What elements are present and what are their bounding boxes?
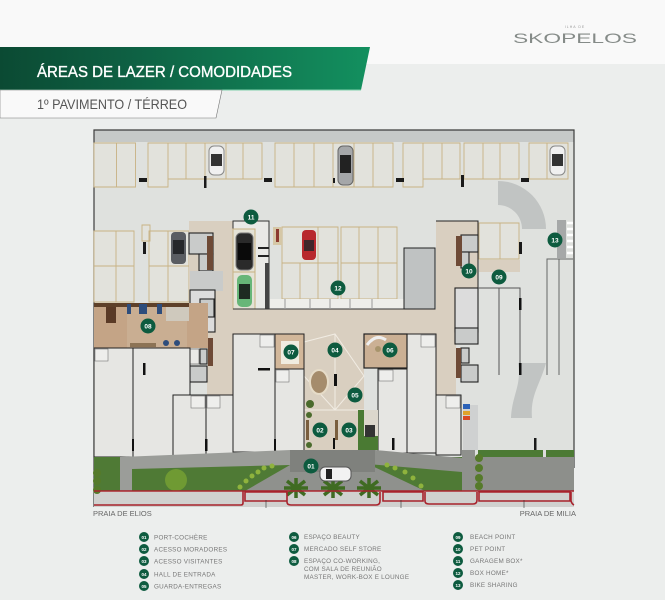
store markers: [132, 363, 394, 451]
sidewalk ticks: [266, 500, 524, 508]
map number markers: 03: [345, 428, 353, 434]
logo: Ilha de Skopelos: ILHA DE: [565, 25, 585, 29]
map number markers: 09: [495, 274, 503, 282]
map number markers: 12: [334, 286, 342, 292]
legend column 2: [289, 532, 409, 581]
car: gray top: [338, 146, 353, 185]
map number markers: [140, 210, 562, 474]
lot markers: [139, 175, 536, 450]
legend column 2: MASTER, WORK-BOX E LOUNGE: [304, 574, 409, 581]
legend column 1: GUARDA-ENTREGAS: [154, 584, 221, 590]
location labels: PRAIA DE ELIOS: [93, 509, 152, 518]
plaza: [304, 334, 364, 410]
legend column 3: [453, 532, 523, 590]
legend column 1: ACESSO VISITANTES: [154, 558, 223, 566]
legend column 3: PET POINT: [470, 546, 505, 553]
car: black: [236, 233, 253, 270]
legend column 3: 09: [455, 535, 461, 540]
map number markers: 06: [386, 348, 394, 354]
legend column 3: BOX HOME*: [470, 570, 509, 577]
subtitle banner: 1º PAVIMENTO / TÉRREO: [37, 96, 187, 112]
car: red: [302, 230, 316, 260]
store fixtures: [95, 335, 460, 408]
map number markers: 08: [144, 324, 152, 330]
bike sharing rack: [557, 220, 573, 258]
title banner: [0, 47, 370, 90]
bike colours: [463, 404, 478, 450]
map number markers: 07: [287, 350, 295, 356]
coworking room: [94, 303, 208, 348]
core left: [187, 233, 223, 382]
legend column 2: ESPAÇO CO-WORKING,: [304, 558, 380, 565]
car at port-cochère: [320, 467, 351, 481]
legend column 1: 04: [141, 572, 147, 577]
planters: [207, 236, 462, 378]
shrubs and palms: [93, 454, 483, 498]
beach point strip: [436, 221, 573, 375]
legend column 2: 08: [291, 559, 297, 564]
map number markers: 11: [248, 214, 255, 222]
legend column 3: BEACH POINT: [470, 534, 515, 541]
legend column 1: ACESSO MORADORES: [154, 546, 227, 554]
location labels: [93, 509, 576, 518]
legend column 1: HALL DE ENTRADA: [154, 572, 216, 578]
legend column 3: GARAGEM BOX*: [470, 558, 523, 565]
grounds and road: [94, 450, 574, 507]
stores: [94, 334, 461, 457]
parking: top row: [94, 143, 568, 187]
legend column 1: 03: [141, 559, 147, 564]
map number markers: 10: [465, 268, 473, 276]
legend column 1: 05: [141, 584, 147, 589]
legend column 3: 13: [455, 583, 461, 588]
car: white top left: [209, 146, 224, 175]
car: white top right: [550, 146, 565, 175]
logo: Ilha de Skopelos: SKOPELOS: [513, 30, 637, 46]
beige circulation: [189, 221, 478, 452]
car: dark gray: [171, 232, 186, 264]
legend column 2: COM SALA DE REUNIÃO: [304, 564, 382, 573]
parking: middle rows: [94, 223, 519, 302]
ramps: [498, 181, 546, 418]
location labels: PRAIA DE MILIA: [520, 509, 576, 518]
floor plan: [93, 130, 574, 508]
title banner: ÁREAS DE LAZER / COMODIDADES: [37, 64, 292, 81]
map number markers: 13: [551, 238, 559, 244]
legend column 1: [139, 532, 227, 591]
map number markers: 02: [316, 428, 324, 434]
legend column 3: 12: [455, 571, 461, 576]
legend column 2: 07: [291, 547, 297, 552]
subtitle banner: [0, 90, 222, 118]
core right: [455, 235, 478, 382]
map number markers: 05: [351, 392, 359, 400]
garage box area: [233, 221, 282, 309]
map number markers: 04: [331, 348, 339, 354]
legend column 2: 06: [291, 535, 297, 540]
legend column 3: BIKE SHARING: [470, 582, 518, 589]
car: green: [237, 275, 252, 307]
beauty room: [364, 334, 407, 368]
legend column 1: PORT-COCHÈRE: [154, 532, 208, 542]
legend column 3: 10: [455, 547, 461, 552]
legend column 3: 11: [456, 559, 461, 564]
logo: Ilha de Skopelos: [513, 25, 637, 46]
legend column 1: 02: [141, 547, 147, 552]
parked cars: [171, 146, 565, 307]
plaza sculpture and gardens: [306, 370, 378, 450]
gray room: [404, 248, 435, 309]
mercado room: [275, 334, 304, 369]
map number markers: 01: [307, 464, 315, 470]
legend column 2: MERCADO SELF STORE: [304, 546, 382, 553]
red sidewalk lines: [94, 491, 574, 505]
legend column 2: ESPAÇO BEAUTY: [304, 534, 361, 541]
legend column 1: 01: [141, 535, 147, 540]
box strip: [233, 299, 435, 309]
